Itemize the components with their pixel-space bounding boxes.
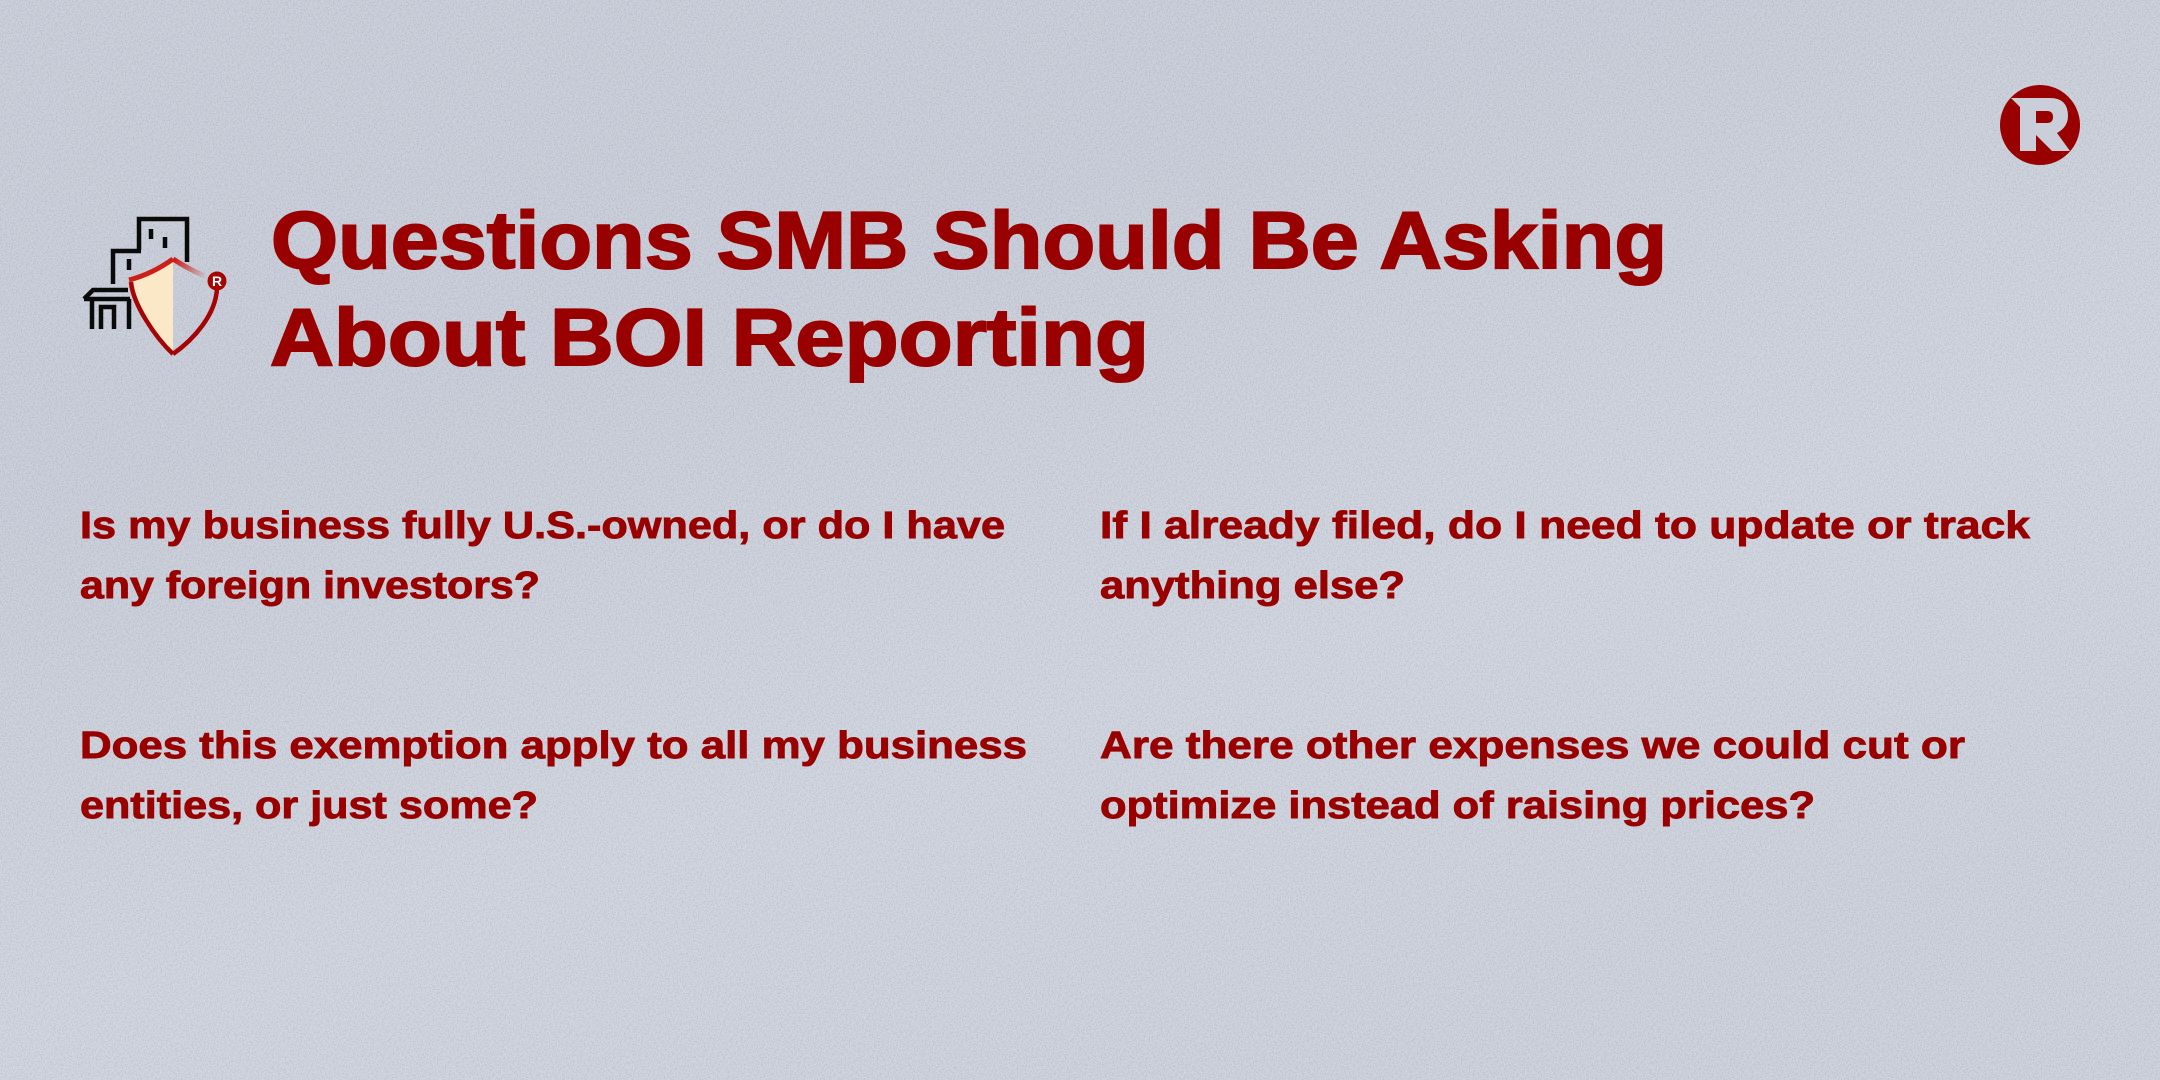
question: exemption scope: entities, or just some? (80, 785, 538, 827)
question: other expenses: optimize instead of raising prices? (1100, 785, 1815, 827)
icon: shield: R (212, 273, 222, 289)
title: About BOI Reporting (270, 293, 1149, 383)
icon: shield (129, 259, 226, 354)
question: other expenses: Are there other expenses we could cut or (1100, 725, 1965, 767)
question: update after filing: If I already filed, do I need to update or track (1100, 505, 2031, 547)
question: foreign investors (80, 505, 1005, 607)
question: exemption scope (80, 725, 1027, 827)
question: foreign investors: any foreign investors? (80, 565, 540, 607)
title: Questions SMB Should Be Asking (271, 196, 1667, 286)
question: update after filing (1100, 505, 2031, 607)
title (270, 196, 1667, 383)
icon: buildings and shield (84, 219, 226, 354)
icon: buildings (84, 219, 187, 329)
question: exemption scope: Does this exemption apply to all my business (80, 725, 1027, 767)
logo: R badge (2000, 85, 2080, 165)
question: update after filing: anything else? (1100, 565, 1405, 607)
question: other expenses (1100, 725, 1965, 827)
question: foreign investors: Is my business fully U.S.-owned, or do I have (80, 505, 1005, 547)
